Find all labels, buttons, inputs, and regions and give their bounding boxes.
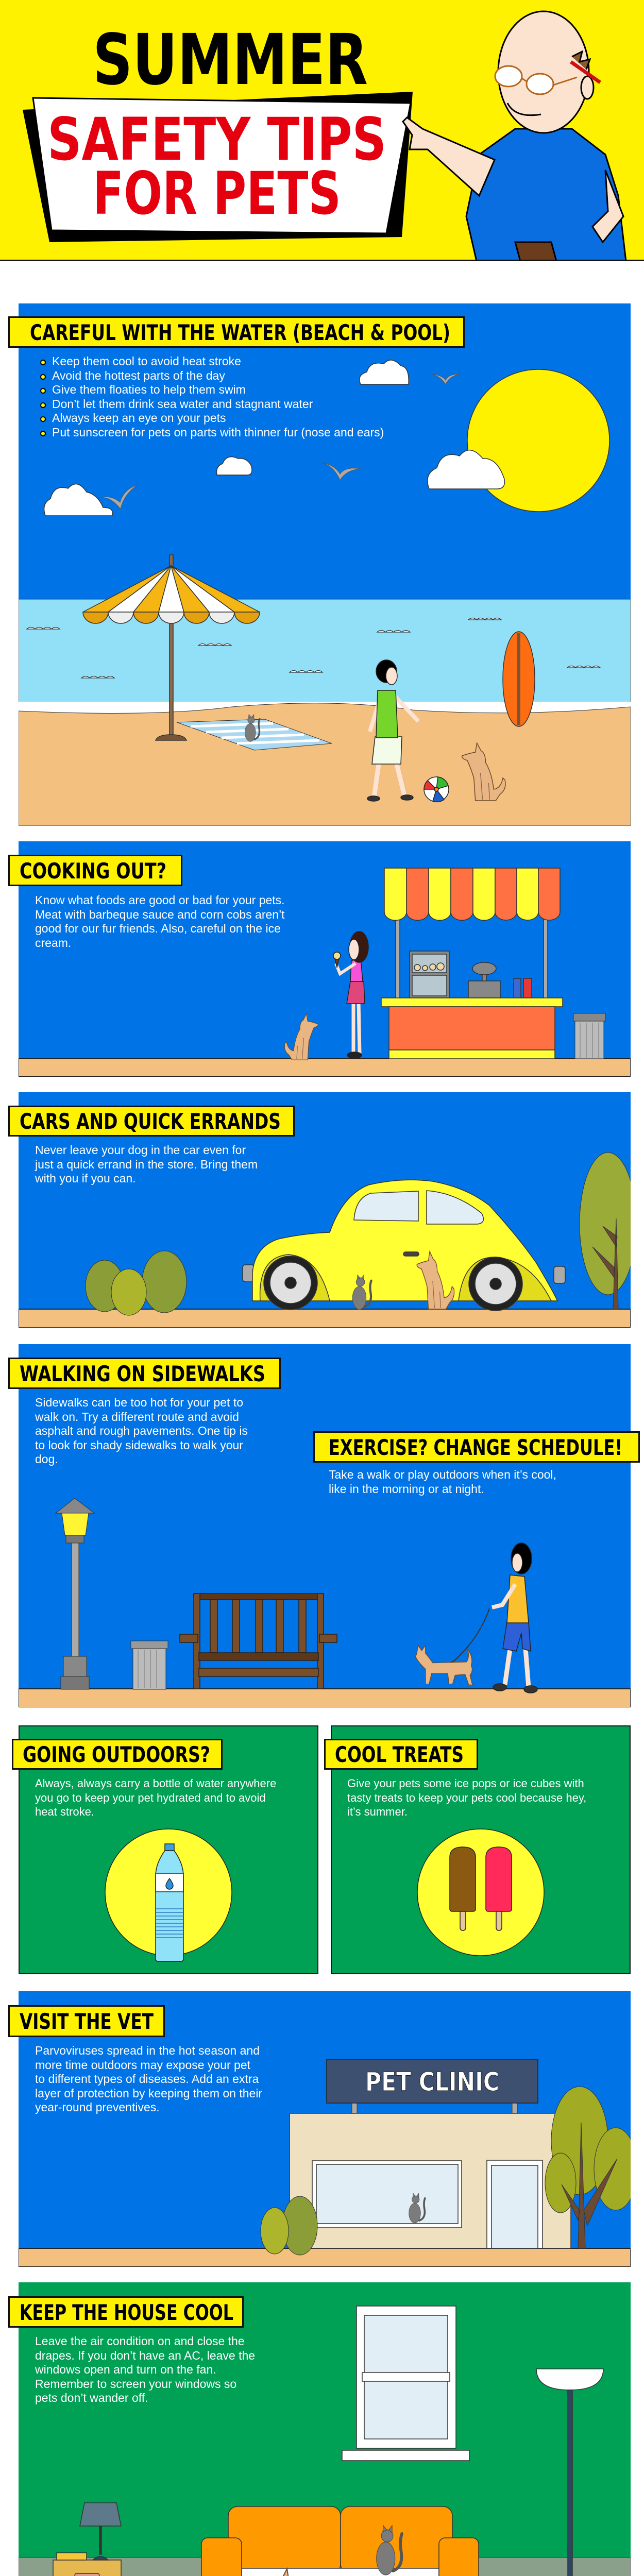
- text: house: [35, 2334, 255, 2404]
- text: cars: [35, 1143, 258, 1185]
- bullet list: Keep them cool to avoid heat stroke: [52, 354, 241, 368]
- text: going outdoors: heat stroke.: [35, 1805, 94, 1818]
- sign: SAFETY TIPS: [47, 105, 386, 174]
- bullet list: [40, 354, 384, 439]
- man walking dog: [438, 1543, 537, 1693]
- text: vet: Parvoviruses spread in the hot season and: [35, 2044, 260, 2057]
- panel: cooking out: [19, 841, 631, 1077]
- text: house: drapes. If you don’t have an AC, leave the: [35, 2349, 255, 2362]
- text: vet: [35, 2044, 262, 2114]
- text: cool treats: Give your pets some ice pops or ice cubes with: [347, 1777, 584, 1790]
- text: house: windows open and turn on the fan.: [35, 2363, 216, 2376]
- nightstand with lamp: [53, 2503, 121, 2576]
- text: exercise: like in the morning or at night.: [329, 1482, 484, 1496]
- text: cooking out: cream.: [35, 936, 71, 950]
- bushes: [86, 1251, 187, 1315]
- text: cooking out: Know what foods are good or bad for your pets.: [35, 893, 285, 907]
- dog looking up: [284, 1014, 318, 1060]
- bullet list: Put sunscreen for pets on parts with thinner fur (nose and ears): [52, 426, 384, 439]
- text: vet: layer of protection by keeping them on their: [35, 2087, 262, 2100]
- pet clinic sign: [327, 2059, 538, 2114]
- title: summer: SUMMER: [93, 20, 368, 101]
- cat on towel: [245, 715, 260, 741]
- mascot: joe pointing: [403, 11, 626, 261]
- sea: [19, 599, 631, 707]
- towel: [177, 719, 332, 750]
- text: exercise: [329, 1468, 556, 1496]
- text: walking: asphalt and rough pavements. One tip is: [35, 1424, 248, 1437]
- panel: going outdoors: [19, 1725, 318, 1974]
- text: going outdoors: [35, 1777, 276, 1818]
- text: going outdoors: Always, always carry a bottle of water anywhere: [35, 1777, 276, 1790]
- text: cooking out: good for our fur friends. Also, careful on the ice: [35, 922, 281, 935]
- panel: keep the house cool: [19, 2282, 631, 2576]
- text: cool treats: [347, 1777, 586, 1818]
- window: [342, 2306, 469, 2461]
- text: vet: to different types of diseases. Add an extra: [35, 2072, 259, 2086]
- beach ball: [424, 777, 449, 802]
- text: vet: year-round preventives.: [35, 2100, 160, 2114]
- text: walking: walk on. Try a different route and avoid: [35, 1410, 239, 1423]
- tree: [580, 1153, 636, 1309]
- food stand: [381, 868, 563, 1059]
- icon: ice pops: [417, 1829, 544, 1956]
- street lamp: [56, 1498, 94, 1689]
- sign: FOR PETS: [93, 159, 341, 228]
- text: cooking out: [35, 893, 285, 950]
- bullet list: Don’t let them drink sea water and stagnant water: [52, 397, 313, 410]
- boy: [367, 660, 418, 801]
- text: cars: just a quick errand in the store. Bring them: [35, 1158, 258, 1171]
- text: walking: dog.: [35, 1452, 58, 1466]
- text: walking: Sidewalks can be too hot for your pet to: [35, 1396, 243, 1409]
- text: house: Remember to screen your windows so: [35, 2377, 236, 2391]
- panel: visit the vet: [19, 1991, 631, 2267]
- cat on sofa: [377, 2526, 402, 2575]
- text: house: pets don’t wander off.: [35, 2391, 148, 2404]
- bullet list: Always keep an eye on your pets: [52, 411, 226, 425]
- surfboard: [503, 632, 535, 726]
- clouds: [44, 360, 504, 516]
- dog on rug: [249, 2569, 307, 2576]
- text: cool treats: tasty treats to keep your pets cool because hey,: [347, 1791, 586, 1804]
- panel: careful with the water: [19, 303, 631, 826]
- clinic building: [290, 2113, 571, 2248]
- text: going outdoors: you go to keep your pet hydrated and to avoid: [35, 1791, 266, 1804]
- bullet list: Give them floaties to help them swim: [52, 383, 246, 396]
- header: [0, 0, 644, 261]
- trash can: [573, 1013, 605, 1059]
- pet clinic sign: PET CLINIC: [365, 2067, 499, 2097]
- text: cars: with you if you can.: [35, 1172, 136, 1185]
- dog: [462, 743, 505, 801]
- sign: [23, 92, 413, 242]
- text: house: Leave the air condition on and close the: [35, 2334, 245, 2348]
- girl with ice cream: [333, 931, 368, 1058]
- text: vet: more time outdoors may expose your pet: [35, 2058, 250, 2072]
- sofa: [201, 2506, 479, 2576]
- panel: cool treats: [331, 1725, 631, 1974]
- cat and dog by car: [352, 1275, 371, 1310]
- text: walking: [35, 1396, 248, 1466]
- text: walking: to look for shady sidewalks to walk your: [35, 1438, 243, 1452]
- panel: walking on sidewalks: [19, 1344, 631, 1707]
- umbrella: [83, 555, 260, 740]
- sand: [19, 703, 631, 826]
- bench: [180, 1594, 337, 1689]
- panel: cars and quick errands: [19, 1092, 631, 1328]
- text: exercise: Take a walk or play outdoors when it’s cool,: [329, 1468, 556, 1481]
- text: cooking out: Meat with barbeque sauce and corn cobs aren’t: [35, 908, 285, 921]
- yellow car: [243, 1180, 565, 1311]
- cat in window: [409, 2193, 425, 2223]
- birds: [99, 374, 460, 509]
- sun: [467, 369, 609, 512]
- text: cool treats: it’s summer.: [347, 1805, 408, 1818]
- text: cars: Never leave your dog in the car even for: [35, 1143, 246, 1157]
- icon: water bottle: [105, 1829, 232, 1961]
- trash can: [131, 1641, 168, 1689]
- floor lamp: [536, 2369, 603, 2576]
- bushes and tree: [261, 2087, 637, 2255]
- bullet list: Avoid the hottest parts of the day: [52, 369, 225, 382]
